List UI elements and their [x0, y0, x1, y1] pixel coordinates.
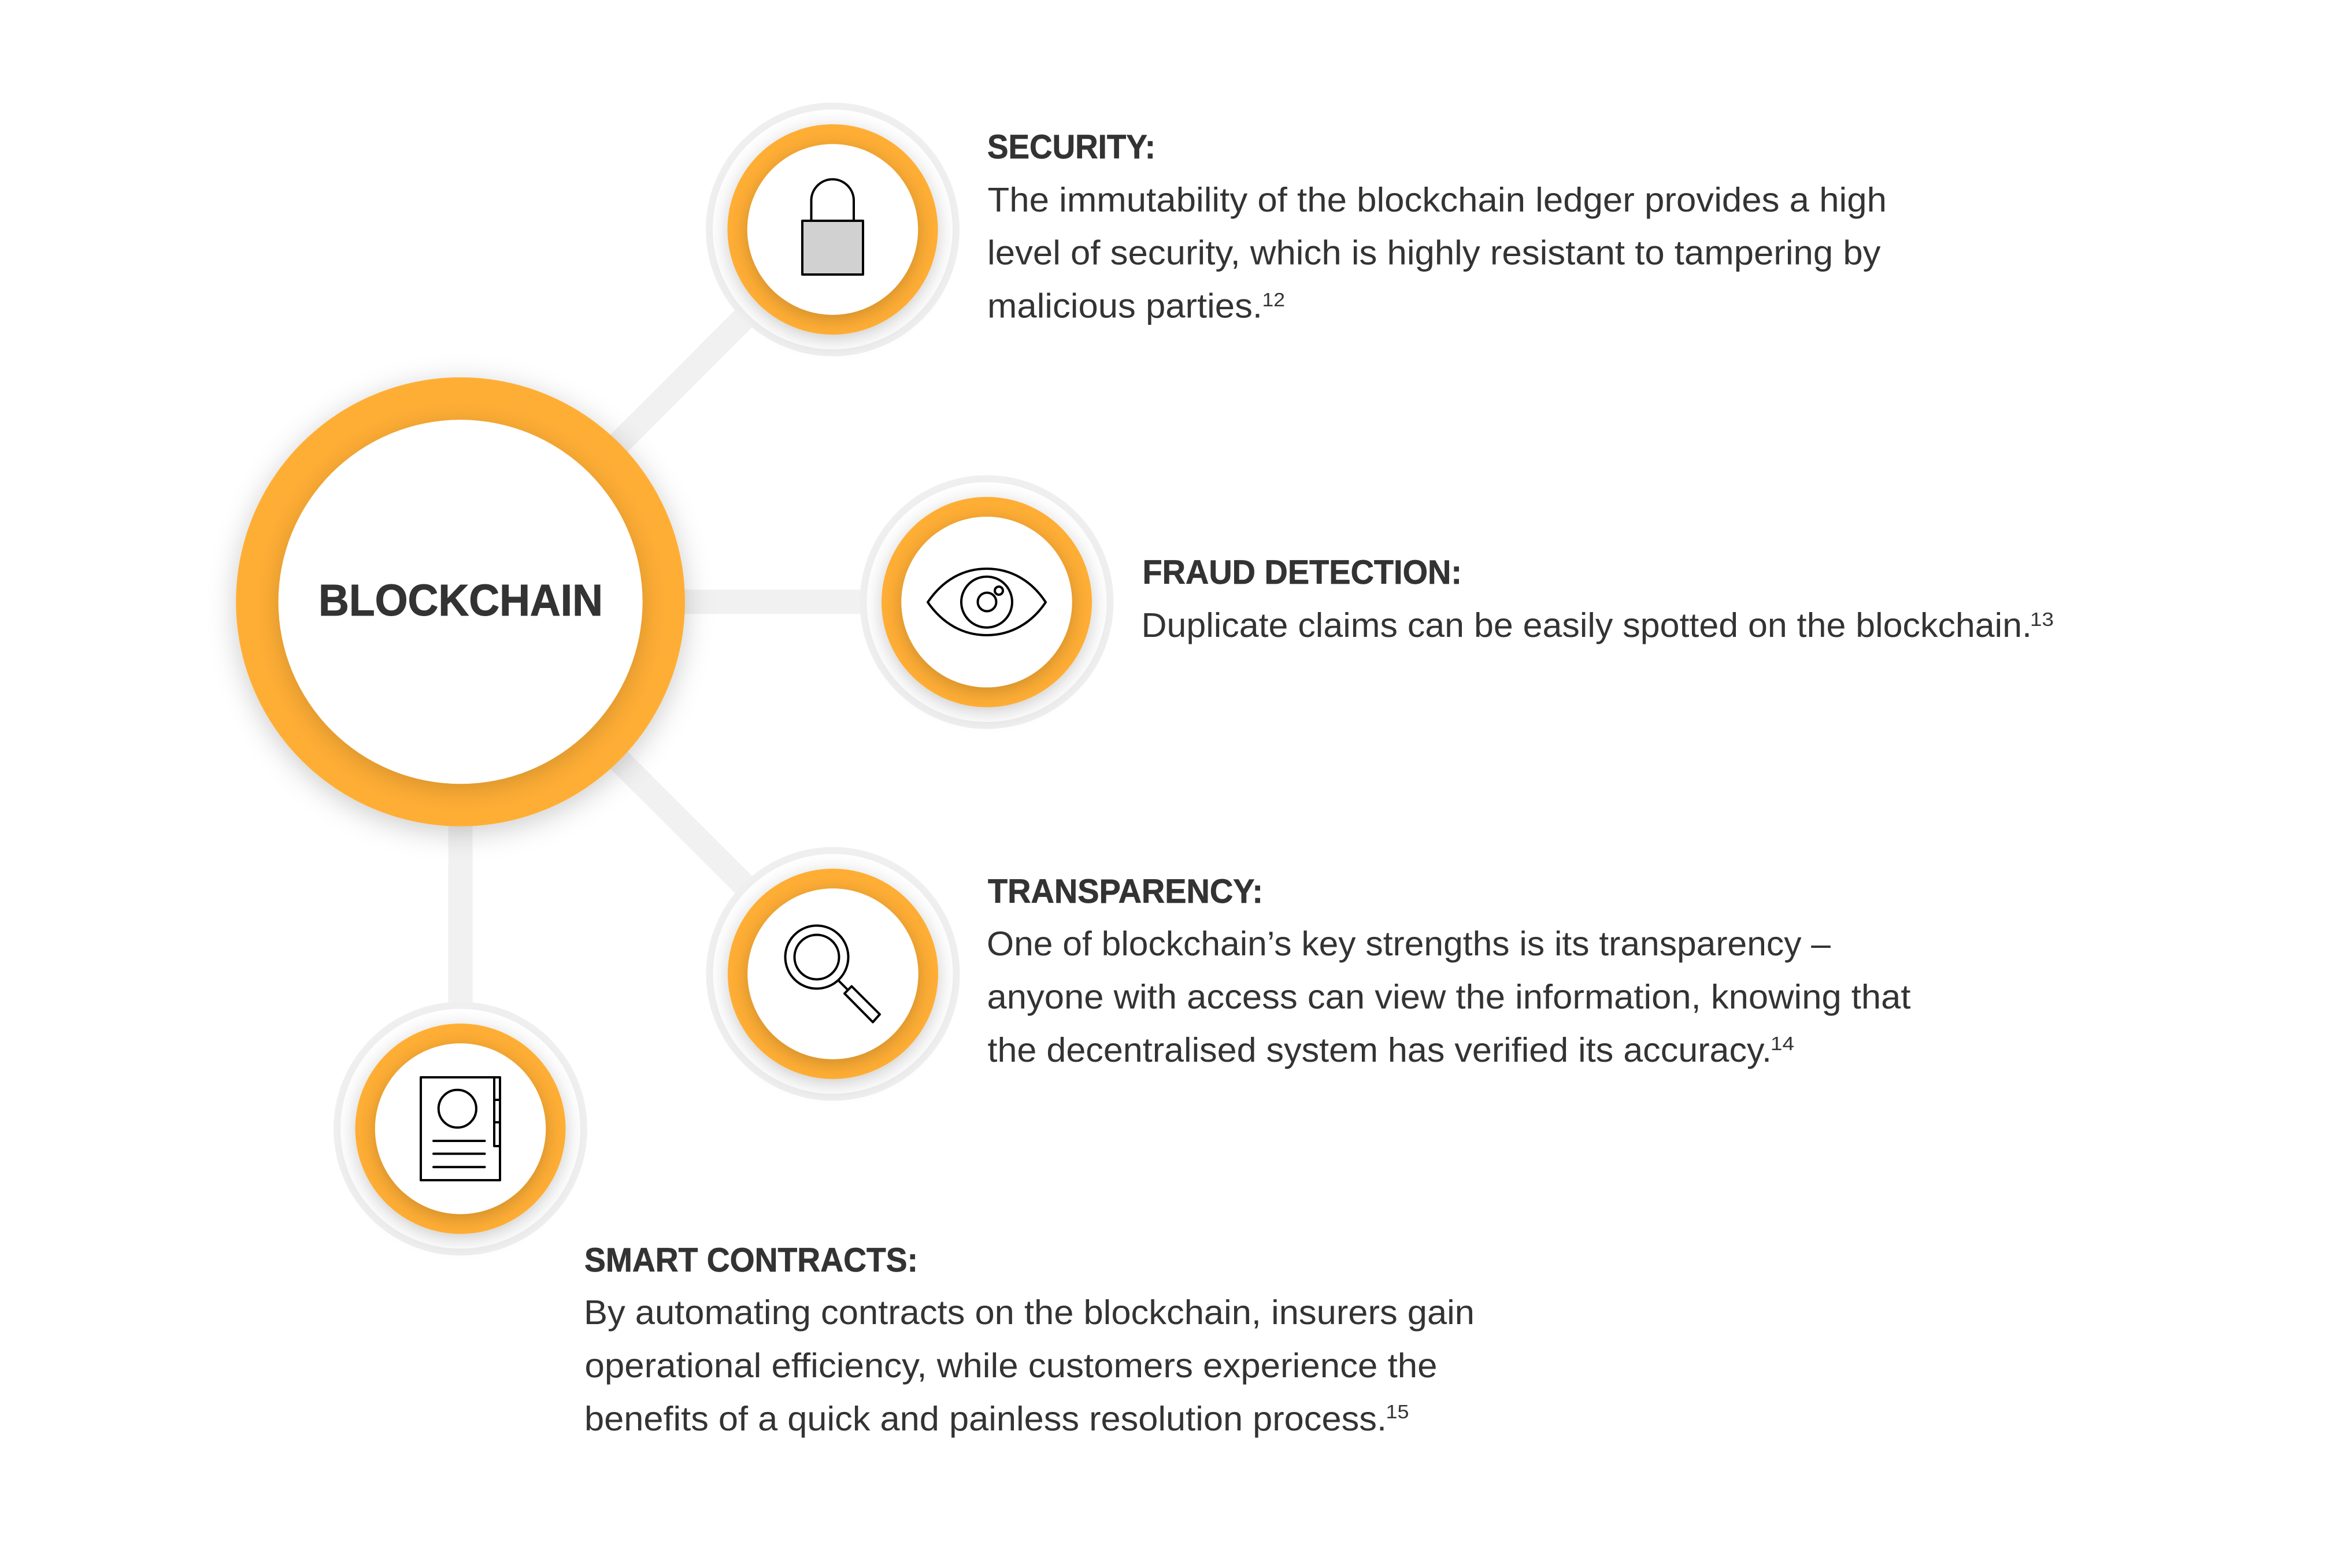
body: security — [987, 181, 1887, 325]
body: security: level of security, which is highly resistant to tampering by — [987, 233, 1881, 272]
node: transparency — [710, 851, 956, 1097]
body: security: 12 — [1262, 289, 1285, 310]
icon: padlock — [802, 179, 863, 275]
body: transparency — [987, 925, 1911, 1069]
body: transparency: the decentralised system has verified its accuracy. — [987, 1031, 1772, 1069]
central node: blockchain — [236, 377, 685, 826]
body: fraud detection: Duplicate claims can be easily spotted on the blockchain. — [1141, 606, 2032, 644]
text block: transparency — [987, 873, 1911, 1069]
body: smart contracts: By automating contracts on the blockchain, insurers gain — [584, 1293, 1475, 1332]
text block: security — [987, 128, 1887, 325]
node: security — [709, 106, 956, 353]
heading: fraud detection: FRAUD DETECTION: — [1142, 554, 1462, 591]
body: smart contracts: operational efficiency, while customers experience the — [585, 1347, 1437, 1385]
body: smart contracts: 15 — [1386, 1401, 1409, 1422]
heading: security: SECURITY: — [987, 128, 1155, 166]
body: transparency: One of blockchain’s key strengths is its transparency – — [987, 925, 1831, 963]
icon: document — [421, 1077, 500, 1180]
heading: smart contracts: SMART CONTRACTS: — [584, 1241, 918, 1279]
icon: eye — [928, 569, 1046, 635]
icon: magnifying glass — [785, 926, 880, 1022]
body: transparency: 14 — [1771, 1033, 1794, 1054]
connector lines — [460, 229, 987, 1129]
body: smart contracts — [584, 1293, 1475, 1438]
body: smart contracts: benefits of a quick and painless resolution process. — [584, 1400, 1387, 1438]
heading: transparency: TRANSPARENCY: — [988, 873, 1263, 910]
body: security: malicious parties. — [987, 287, 1262, 325]
body: transparency: anyone with access can view the information, knowing that — [987, 978, 1911, 1016]
text block: fraud detection — [1141, 554, 2054, 644]
text block: smart contracts — [584, 1241, 1475, 1438]
node: smart contracts — [337, 1006, 584, 1252]
node: fraud detection — [864, 479, 1110, 725]
body: fraud detection: 13 — [2030, 609, 2054, 630]
body: security: The immutability of the blockchain ledger provides a high — [987, 181, 1887, 219]
central label: BLOCKCHAIN — [318, 576, 603, 625]
